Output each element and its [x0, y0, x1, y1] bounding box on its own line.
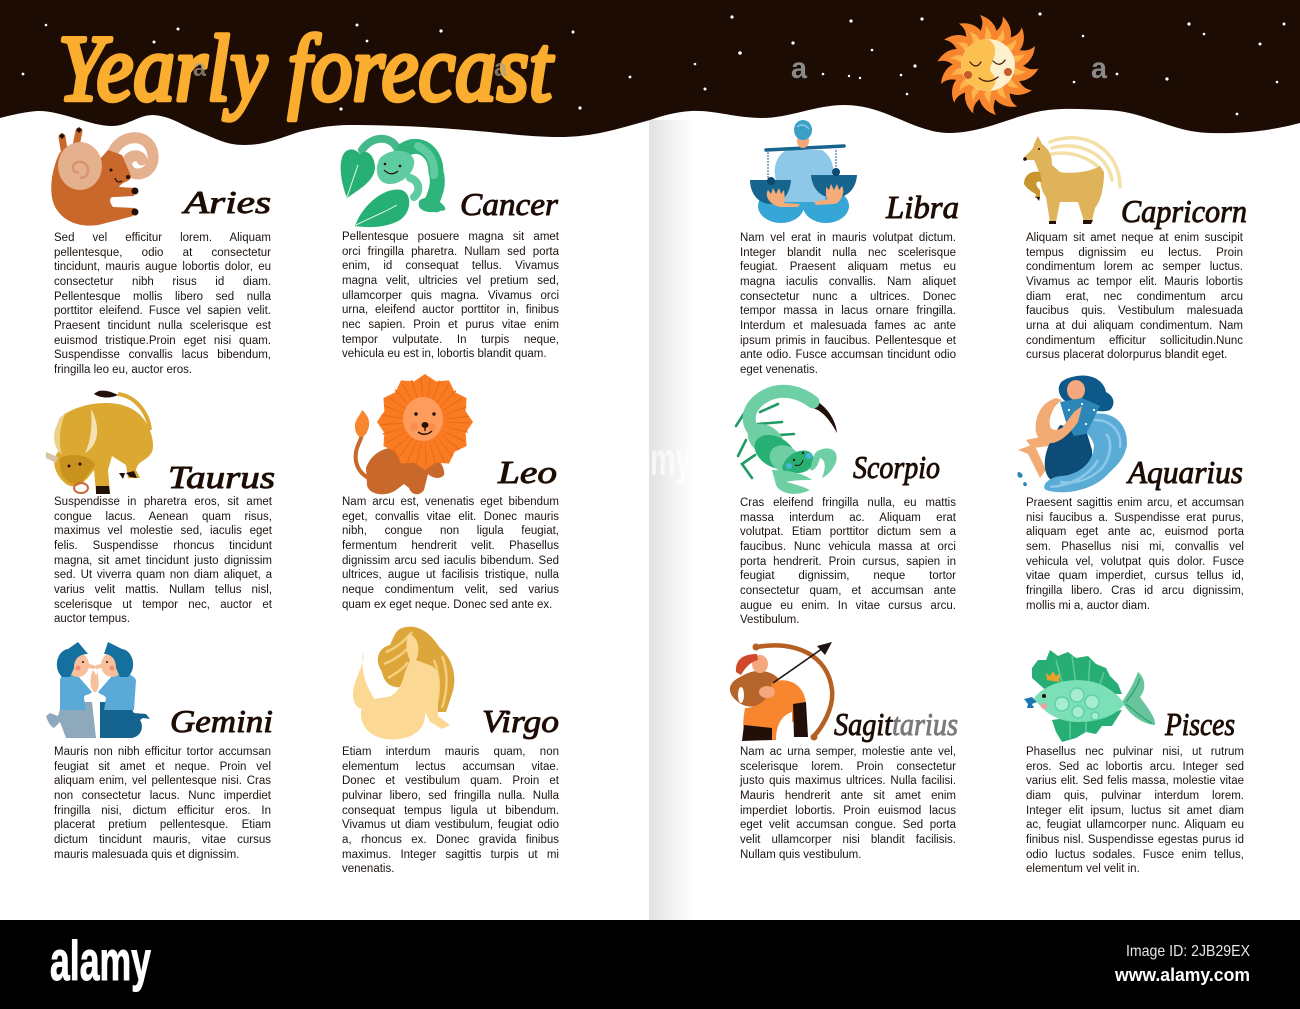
- text: Pisces forecast: eros. Sed ac lobortis arcu. Integer sed: [1026, 761, 1244, 773]
- text: Capricorn forecast: [1026, 232, 1244, 361]
- text: Aquarius forecast: aliquam eget ante ac, euismod porta: [1026, 526, 1244, 538]
- heading: Taurus: Taurus: [168, 459, 275, 495]
- text: Gemini forecast: Mauris non nibh efficitur tortor accumsan: [54, 746, 271, 758]
- text: Gemini forecast: dictum tincidunt mauris, vitae cursus: [54, 834, 271, 846]
- icon: crab: [340, 134, 446, 228]
- text: Cancer forecast: ullamcorper quis magna. Vivamus orci: [342, 290, 559, 302]
- text: Cancer forecast: magna velit, ultricies vel pretium sed,: [342, 275, 559, 287]
- panel: Gemini: [46, 642, 273, 861]
- text: Libra forecast: feugiat. Praesent aliquam metus eu: [740, 261, 956, 273]
- icon: ram: [51, 127, 159, 226]
- panel: Virgo: [342, 626, 560, 875]
- text: Aries forecast: consectetur nibh risus id diam.: [54, 276, 271, 288]
- text: Virgo forecast: consequat tempus ligula ut bibendum.: [342, 805, 559, 817]
- text: Aries forecast: Sed vel efficitur lorem. Aliquam: [54, 232, 271, 244]
- text: Libra forecast: consectetur nunc a ultrices. Donec: [740, 291, 956, 303]
- heading: Scorpio: Scorpio: [853, 449, 940, 485]
- text: Libra forecast: Interdum et malesuada fames ac ante: [740, 320, 956, 332]
- panel: Sagittarius: [722, 638, 962, 866]
- text: Gemini forecast: feugiat sit amet et neque. Proin vel: [54, 761, 271, 773]
- text: Virgo forecast: [342, 746, 560, 875]
- heading: Libra: Libra: [885, 189, 959, 225]
- text: Capricorn forecast: Aliquam sit amet neque at enim suscipit: [1026, 232, 1243, 244]
- text: Gemini forecast: non consectetur lacus. Nunc imperdiet: [54, 790, 271, 802]
- text: Sagittarius forecast: imperdiet lobortis. Proin euismod lacus: [740, 805, 956, 817]
- text: Capricorn forecast: condimentum efficitur sollicitudin.Nunc: [1026, 335, 1243, 347]
- title: a: [494, 55, 508, 82]
- heading: Aries: Aries: [181, 184, 271, 220]
- heading: Capricorn: Capricorn: [1121, 193, 1247, 229]
- text: Gemini forecast: fringilla nisi, dictum efficitur eros. In: [54, 805, 271, 817]
- text: Aries forecast: fringilla leo eu, auctor eros.: [54, 364, 192, 376]
- text: Libra forecast: Integer blandit nulla nec scelerisque: [740, 247, 956, 259]
- text: Cancer forecast: Pellentesque posuere magna sit amet: [342, 231, 559, 243]
- text: Pisces forecast: elementum vel velit in.: [1026, 863, 1140, 875]
- text: Taurus forecast: sed. Ut viverra quam non diam aliquet, a: [54, 569, 272, 581]
- heading: Cancer: Cancer: [460, 186, 559, 222]
- footer bar with stock watermark: alamy: [50, 929, 151, 992]
- heading: Leo: Leo: [497, 454, 557, 490]
- text: Aquarius forecast: Praesent sagittis enim arcu, et accumsan: [1026, 497, 1244, 509]
- text: Taurus forecast: scelerisque ut tempor nec, auctor et: [54, 599, 272, 611]
- text: Sagittarius forecast: scelerisque lorem. Proin consectetur: [740, 761, 956, 773]
- text: Capricorn forecast: cursus placerat dolorpurus blandit eget.: [1026, 349, 1227, 361]
- icon: fish with crown: [1022, 646, 1158, 746]
- text: Aries forecast: Praesent tincidunt nulla scelerisque est: [54, 320, 271, 332]
- text: Sagittarius forecast: justo quis maximus ultrices. Nulla facilisi.: [740, 775, 956, 787]
- text: Aquarius forecast: vehicula vel, volutpat quis dolor. Fusce: [1026, 556, 1244, 568]
- text: Gemini forecast: placerat pretium pellentesque. Etiam: [54, 819, 271, 831]
- text: Scorpio forecast: porta hendrerit. Proin cursus, sapien in: [740, 556, 956, 568]
- text: Taurus forecast: [54, 496, 272, 625]
- text: Scorpio forecast: faucibus. Nunc vehicula massa at orci: [740, 541, 956, 553]
- text: Scorpio forecast: consectetur quam, et accumsan ante: [740, 585, 956, 597]
- panel: Aries: [51, 127, 272, 376]
- night sky header band: [0, 0, 1300, 145]
- text: Aquarius forecast: sem. Phasellus nisi mi, convallis vel: [1026, 541, 1244, 553]
- text: Taurus forecast: auctor tempus.: [54, 613, 130, 625]
- text: Cancer forecast: orci fringilla pharetra. Nullam sed porta: [342, 246, 559, 258]
- text: Pisces forecast: ac, feugiat ullamcorper nunc. Aliquam eu: [1026, 819, 1244, 831]
- text: Capricorn forecast: tempus dignissim eu lectus. Proin: [1026, 247, 1243, 259]
- text: Aries forecast: pellentesque, odio at consectetur: [54, 247, 271, 259]
- watermark letters: a: [1091, 52, 1107, 85]
- watermark: faint letters in gutter: my: [650, 433, 691, 485]
- text: Virgo forecast: elementum lectus accumsan vitae.: [342, 761, 559, 773]
- text: Scorpio forecast: Cras eleifend fringilla nulla, eu mattis: [740, 497, 956, 509]
- text: Cancer forecast: enim, id consequat tellus. Vivamus: [342, 260, 559, 272]
- text: Taurus forecast: maximus vel molestie sed, iaculis eget: [54, 525, 272, 537]
- text: Taurus forecast: felis. Suspendisse rhoncus tincidunt: [54, 540, 272, 552]
- text: Sagittarius forecast: Nullam quis vestibulum.: [740, 849, 861, 861]
- text: Libra forecast: ipsum primis in faucibus. Pellentesque et: [740, 335, 956, 347]
- text: Virgo forecast: Donec et vestibulum quam. Proin et: [342, 775, 559, 787]
- text: Gemini forecast: [54, 746, 271, 861]
- text: Cancer forecast: nec sapien. Proin et purus vitae enim: [342, 319, 559, 331]
- footer bar with stock watermark: Image ID: 2JB29EX: [1126, 943, 1250, 960]
- text: Gemini forecast: aliquam enim, vel pellentesque nisi. Cras: [54, 775, 271, 787]
- icon: bull: [46, 390, 153, 494]
- right page gutter shadow: [649, 120, 695, 920]
- text: Pisces forecast: varius elit. Sed felis massa, molestie vitae: [1026, 775, 1244, 787]
- text: Cancer forecast: urna, eleifend auctor porttitor in, finibus: [342, 304, 559, 316]
- text: Aries forecast: Pellentesque mollis libero sed nulla: [54, 291, 271, 303]
- text: Capricorn forecast: diam erat, nec condimentum arcu: [1026, 291, 1243, 303]
- icon: scales figure: [750, 120, 857, 223]
- text: Leo forecast: neque condimentum velit, sed varius: [342, 584, 559, 596]
- text: Leo forecast: ultrices, augue ut facilisis tristique, nulla: [342, 569, 559, 581]
- heading: Sagittarius: Sagittarius: [834, 706, 958, 742]
- text: Cancer forecast: [342, 231, 560, 360]
- text: Taurus forecast: congue lacus. Aenean quam risus,: [54, 511, 272, 523]
- text: Virgo forecast: pulvinar libero, sed fringilla nulla. Nulla: [342, 790, 559, 802]
- text: Aquarius forecast: nisi faucibus a. Suspendisse erat purus,: [1026, 512, 1244, 524]
- footer bar with stock watermark: [0, 920, 1300, 1009]
- text: Capricorn forecast: urna at dui aliquam condimentum. Nam: [1026, 320, 1243, 332]
- text: Taurus forecast: varius velit mattis. Nullam tellus nisl,: [54, 584, 272, 596]
- icon: sun with crescent moon face: [938, 15, 1038, 115]
- text: Sagittarius forecast: eget velit accumsan congue. Sed porta: [740, 819, 956, 831]
- icon: lion: [354, 374, 473, 494]
- text: Sagittarius forecast: Nam ac urna semper, molestie ante vel,: [740, 746, 956, 758]
- icon: twins: [46, 642, 150, 738]
- icon: goat: [1023, 136, 1122, 224]
- text: Scorpio forecast: feugiat dignissim, neque tortor: [740, 570, 956, 582]
- text: Leo forecast: fermentum hendrerit velit. Phasellus: [342, 540, 559, 552]
- text: Aquarius forecast: [1026, 496, 1244, 613]
- text: Sagittarius forecast: velit ullamcorper nisi blandit facilisis.: [740, 834, 956, 846]
- text: Scorpio forecast: volutpat. Etiam porttitor dictum sem a: [740, 526, 956, 538]
- text: Sagittarius forecast: Mauris hendrerit ante sit amet enim: [740, 790, 956, 802]
- icon: scorpion: [734, 384, 837, 494]
- text: Aries forecast: tincidunt, mauris augue lobortis dolor, eu: [54, 261, 271, 273]
- text: Pisces forecast: [1026, 745, 1244, 877]
- panel: Aquarius: [1017, 376, 1244, 612]
- text: Capricorn forecast: condimentum lorem ac semper luctus.: [1026, 261, 1243, 273]
- text: Leo forecast: eget, convallis vitae elit. Donec mauris: [342, 511, 559, 523]
- text: Aries forecast: Suspendisse convallis lacus bibendum,: [54, 349, 271, 361]
- text: Sagittarius forecast: [740, 745, 956, 862]
- text: Leo forecast: Nam arcu est, venenatis eget bibendum: [342, 496, 559, 508]
- text: Gemini forecast: mauris malesuada quis et dignissim.: [54, 849, 239, 861]
- text: Scorpio forecast: augue eu enim. In vitae cursus arcu.: [740, 600, 956, 612]
- title: a: [193, 55, 207, 82]
- text: Capricorn forecast: Vivamus ac tempor elit. Mauris lobortis: [1026, 276, 1243, 288]
- text: Pisces forecast: diam quis, pulvinar interdum lorem.: [1026, 790, 1244, 802]
- text: Aries forecast: porttitor eleifend. Fusce vel sapien velit.: [54, 305, 271, 317]
- text: Virgo forecast: Etiam interdum mauris quam, non: [342, 746, 559, 758]
- text: Libra forecast: [740, 232, 956, 376]
- text: Pisces forecast: odio luctus sodales. Fusce enim tellus,: [1026, 849, 1244, 861]
- text: Aquarius forecast: mollis mi a, auctor diam.: [1026, 600, 1150, 612]
- footer bar with stock watermark: www.alamy.com: [1114, 965, 1250, 985]
- text: Aquarius forecast: vitae quam imperdiet, cursus tellus id,: [1026, 570, 1244, 582]
- text: Libra forecast: ante odio. Fusce accumsan tincidunt odio: [740, 349, 956, 361]
- panel: Scorpio: [734, 384, 956, 626]
- text: Virgo forecast: maximus. Integer sagittis turpis ut mi: [342, 849, 559, 861]
- heading: Aquarius: Aquarius: [1126, 454, 1243, 490]
- text: Scorpio forecast: Vestibulum.: [740, 614, 799, 626]
- heading: Gemini: Gemini: [170, 703, 273, 739]
- text: Taurus forecast: Suspendisse in pharetra eros, sit amet: [54, 496, 272, 508]
- text: Scorpio forecast: [740, 497, 956, 626]
- text: Libra forecast: magna iaculis convallis. Nam aliquet: [740, 276, 956, 288]
- title: Yearly forecast: [58, 17, 554, 121]
- text: Aries forecast: euismod tristique.Proin eget nisi quam.: [54, 335, 271, 347]
- stars: [22, 12, 1286, 115]
- text: Pisces forecast: Phasellus nec pulvinar nisi, ut rutrum: [1026, 746, 1244, 758]
- text: Pisces forecast: finibus nisl. Suspendisse egestas purus id: [1026, 834, 1244, 846]
- text: Leo forecast: nibh, congue non ligula feugiat,: [342, 525, 559, 537]
- text: Aries forecast: [54, 232, 272, 376]
- panel: Capricorn: [1023, 136, 1247, 361]
- text: Scorpio forecast: massa interdum ac. Aliquam erat: [740, 512, 956, 524]
- text: Leo forecast: [342, 496, 560, 611]
- text: Libra forecast: tempor massa in lacus ornare fringilla.: [740, 305, 956, 317]
- heading: Virgo: Virgo: [482, 703, 559, 739]
- text: Virgo forecast: Vivamus ut diam vestibulum, feugiat odio: [342, 819, 559, 831]
- text: Libra forecast: Nam vel erat in mauris volutpat dictum.: [740, 232, 956, 244]
- watermark letters: [791, 52, 1107, 85]
- heading: Pisces: Pisces: [1164, 706, 1235, 742]
- panel: Pisces: [1022, 646, 1250, 878]
- text: Leo forecast: quam ex eget neque. Donec sed ante ex.: [342, 599, 552, 611]
- watermark letters: a: [791, 52, 807, 85]
- text: Aquarius forecast: fringilla libero. Cras id arcu dignissim,: [1026, 585, 1244, 597]
- icon: archer: [722, 638, 836, 746]
- text: Taurus forecast: magna, sit amet tincidunt justo dignissim: [54, 555, 272, 567]
- panel: Libra: [740, 120, 959, 376]
- text: Libra forecast: eget venenatis.: [740, 364, 818, 376]
- text: Leo forecast: dignissim arcu sed iaculis bibendum. Sed: [342, 555, 559, 567]
- text: Cancer forecast: tempor vulputate. In turpis neque,: [342, 334, 559, 346]
- icon: maiden: [352, 626, 454, 740]
- panel: Cancer: [340, 134, 560, 360]
- text: Virgo forecast: venenatis.: [342, 863, 394, 875]
- text: Virgo forecast: a, rhoncus ex. Donec gravida finibus: [342, 834, 559, 846]
- icon: water bearer: [1014, 374, 1146, 498]
- panel: Taurus: [46, 390, 275, 625]
- text: Capricorn forecast: faucibus quis. Vestibulum malesuada: [1026, 305, 1243, 317]
- text: Pisces forecast: Integer elit ipsum, luctus sit amet diam: [1026, 805, 1244, 817]
- text: Cancer forecast: vehicula eu est in, lobortis blandit quam.: [342, 348, 547, 360]
- panel: Leo: [342, 374, 560, 611]
